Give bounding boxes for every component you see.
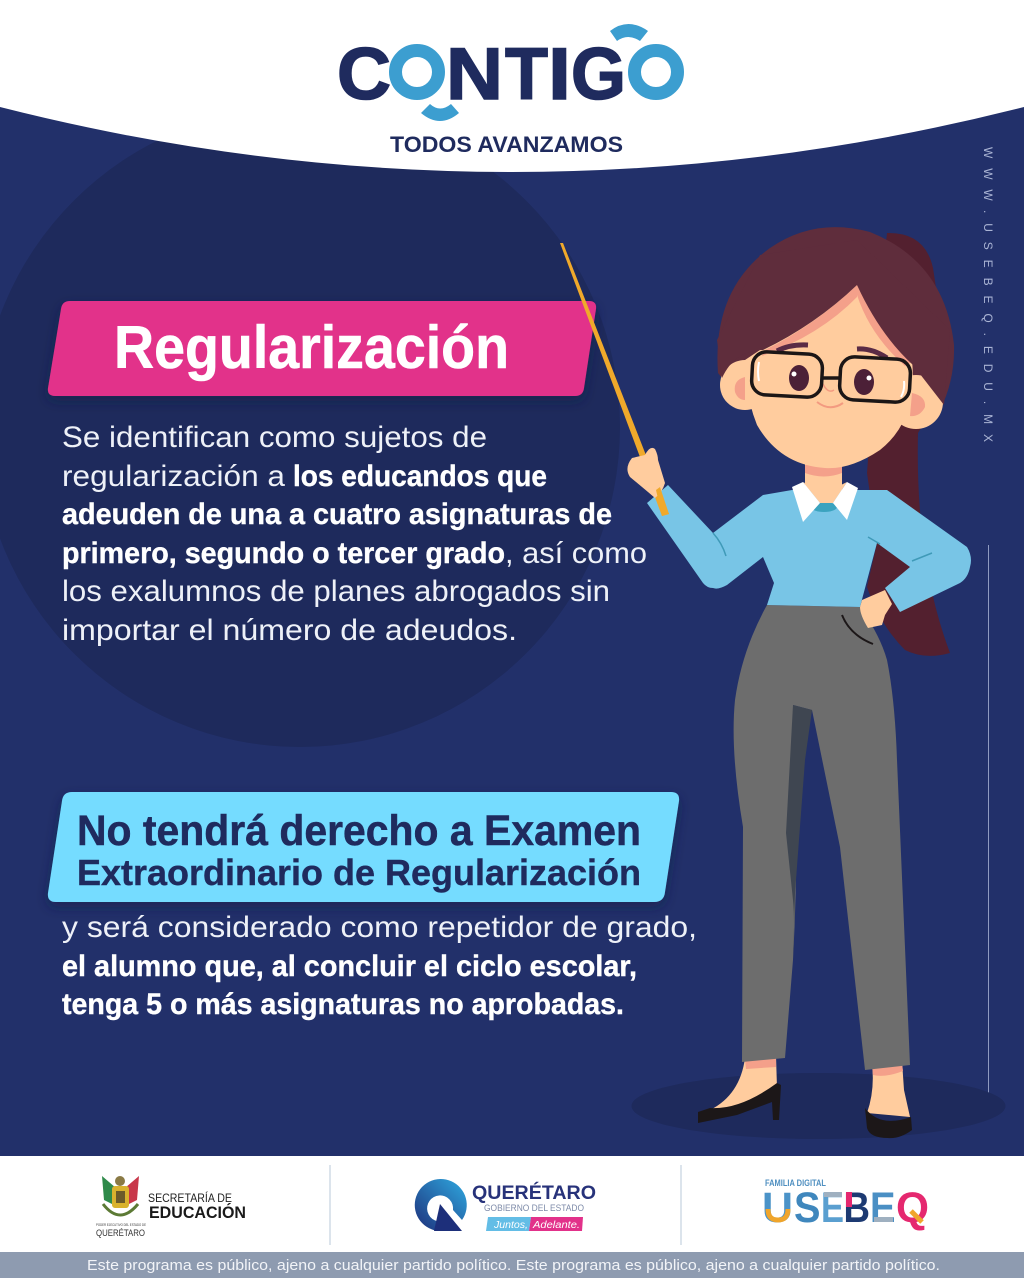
eyes <box>789 365 809 391</box>
sweater fold lines <box>713 533 932 561</box>
logo: Usebeq: Q <box>896 1184 929 1232</box>
paragraph: regularization: los exalumnos de planes abrogados sin <box>62 575 610 608</box>
paragraph: regularization: Se identifican como sujetos de <box>62 421 487 454</box>
vertical website text: WWW.USEBEQ.EDU.MX <box>981 147 995 442</box>
callout banner: no tendrá derecho: No tendrá derecho a Examen <box>77 807 641 855</box>
paragraph: regularization: primero, segundo o tercer grado <box>62 537 505 570</box>
logo: Contigo: O <box>626 34 686 112</box>
vertical rule <box>988 545 989 1097</box>
ears <box>720 360 770 410</box>
inner leg shadow <box>786 705 812 960</box>
left ankle and right ankle <box>710 1056 910 1117</box>
logo: Usebeq: U <box>762 1184 793 1232</box>
paragraph: regularization: los educandos que <box>293 460 547 493</box>
logo: Usebeq: FAMILIA DIGITAL <box>765 1178 826 1188</box>
collar <box>803 482 847 503</box>
hair dome <box>717 227 954 410</box>
heading banner: Regularización <box>48 301 596 396</box>
logo: Secretaría de Educación: PODER EJECUTIVO DEL ESTADO DE <box>96 1222 146 1227</box>
disclaimer band: Este programa es público, ajeno a cualquier partido político. Este programa es público, ajeno a cualquier partido político. <box>87 1257 940 1274</box>
paragraph: regularization <box>62 421 647 647</box>
paragraph: regularization: , así como <box>505 537 647 570</box>
logo: Secretaría de Educación <box>96 1176 246 1239</box>
pocket line <box>842 615 873 644</box>
header white curve <box>0 0 1024 172</box>
paragraph: repeater condition: tenga 5 o más asignaturas no aprobadas. <box>62 988 624 1021</box>
callout banner: no tendrá derecho: Extraordinario de Regularización <box>77 852 641 893</box>
paragraph: repeater condition <box>62 911 697 1021</box>
hip hand <box>860 590 892 628</box>
stick over sleeve <box>656 487 669 516</box>
callout banner: no tendrá derecho <box>48 792 679 902</box>
paragraph: repeater condition: el alumno que, al concluir el ciclo escolar, <box>62 950 637 983</box>
tagline: TODOS AVANZAMOS <box>390 132 623 157</box>
pants <box>734 605 910 1070</box>
footer white band <box>0 1156 1024 1280</box>
left shoe <box>698 1083 781 1123</box>
logo: Contigo: C <box>337 34 391 115</box>
floor shadow <box>632 1073 1006 1139</box>
teacher illustration <box>560 227 971 1138</box>
paragraph: regularization: adeuden de una a cuatro asignaturas de <box>62 498 612 531</box>
logo: Contigo: I <box>548 34 571 115</box>
logo: Querétaro: Juntos, <box>493 1220 528 1231</box>
right shoe <box>865 1108 912 1138</box>
disclaimer band <box>0 1252 1024 1278</box>
heading banner: Regularización: Regularización <box>114 314 509 381</box>
logo: Secretaría de Educación: QUERÉTARO <box>96 1228 145 1239</box>
sock shadow bands <box>745 1058 903 1076</box>
fringe highlight <box>762 285 857 356</box>
pointing hand <box>627 448 665 498</box>
glasses <box>751 351 911 403</box>
logo: Contigo: O <box>386 34 448 112</box>
logo: Usebeq: B <box>844 1184 870 1232</box>
footer dividers <box>330 1165 681 1245</box>
neck <box>805 460 842 510</box>
logo: Usebeq: E <box>821 1184 844 1232</box>
logo: Querétaro: GOBIERNO DEL ESTADO <box>484 1203 584 1214</box>
logo: Contigo: T <box>505 34 548 115</box>
logo: Contigo: N <box>446 34 503 115</box>
logo: Secretaría de Educación: EDUCACIÓN <box>149 1203 246 1222</box>
logo: Usebeq <box>762 1178 929 1232</box>
nose and mouth <box>823 384 834 391</box>
logo: Usebeq: S <box>794 1184 820 1232</box>
logo: Contigo <box>337 24 686 121</box>
logo: Querétaro: Adelante. <box>532 1220 580 1231</box>
pointer stick <box>560 243 669 516</box>
lens highlights <box>758 362 904 397</box>
fringe hair <box>717 240 950 405</box>
sweater <box>647 485 971 612</box>
paragraph: regularization: regularización a <box>62 460 285 493</box>
neckline <box>811 502 837 512</box>
logo: Querétaro: QUERÉTARO <box>472 1182 596 1204</box>
logo: Contigo: G <box>571 34 626 115</box>
face <box>745 285 913 468</box>
logo: Secretaría de Educación: SECRETARÍA DE <box>148 1192 232 1205</box>
eyebrows <box>777 345 808 351</box>
paragraph: repeater condition: y será considerado como repetidor de grado, <box>62 911 697 944</box>
logo: Usebeq: E <box>870 1184 896 1232</box>
logo: Querétaro <box>415 1179 596 1231</box>
background circle <box>0 107 620 747</box>
ponytail <box>867 233 950 656</box>
paragraph: regularization: importar el número de adeudos. <box>62 614 517 647</box>
